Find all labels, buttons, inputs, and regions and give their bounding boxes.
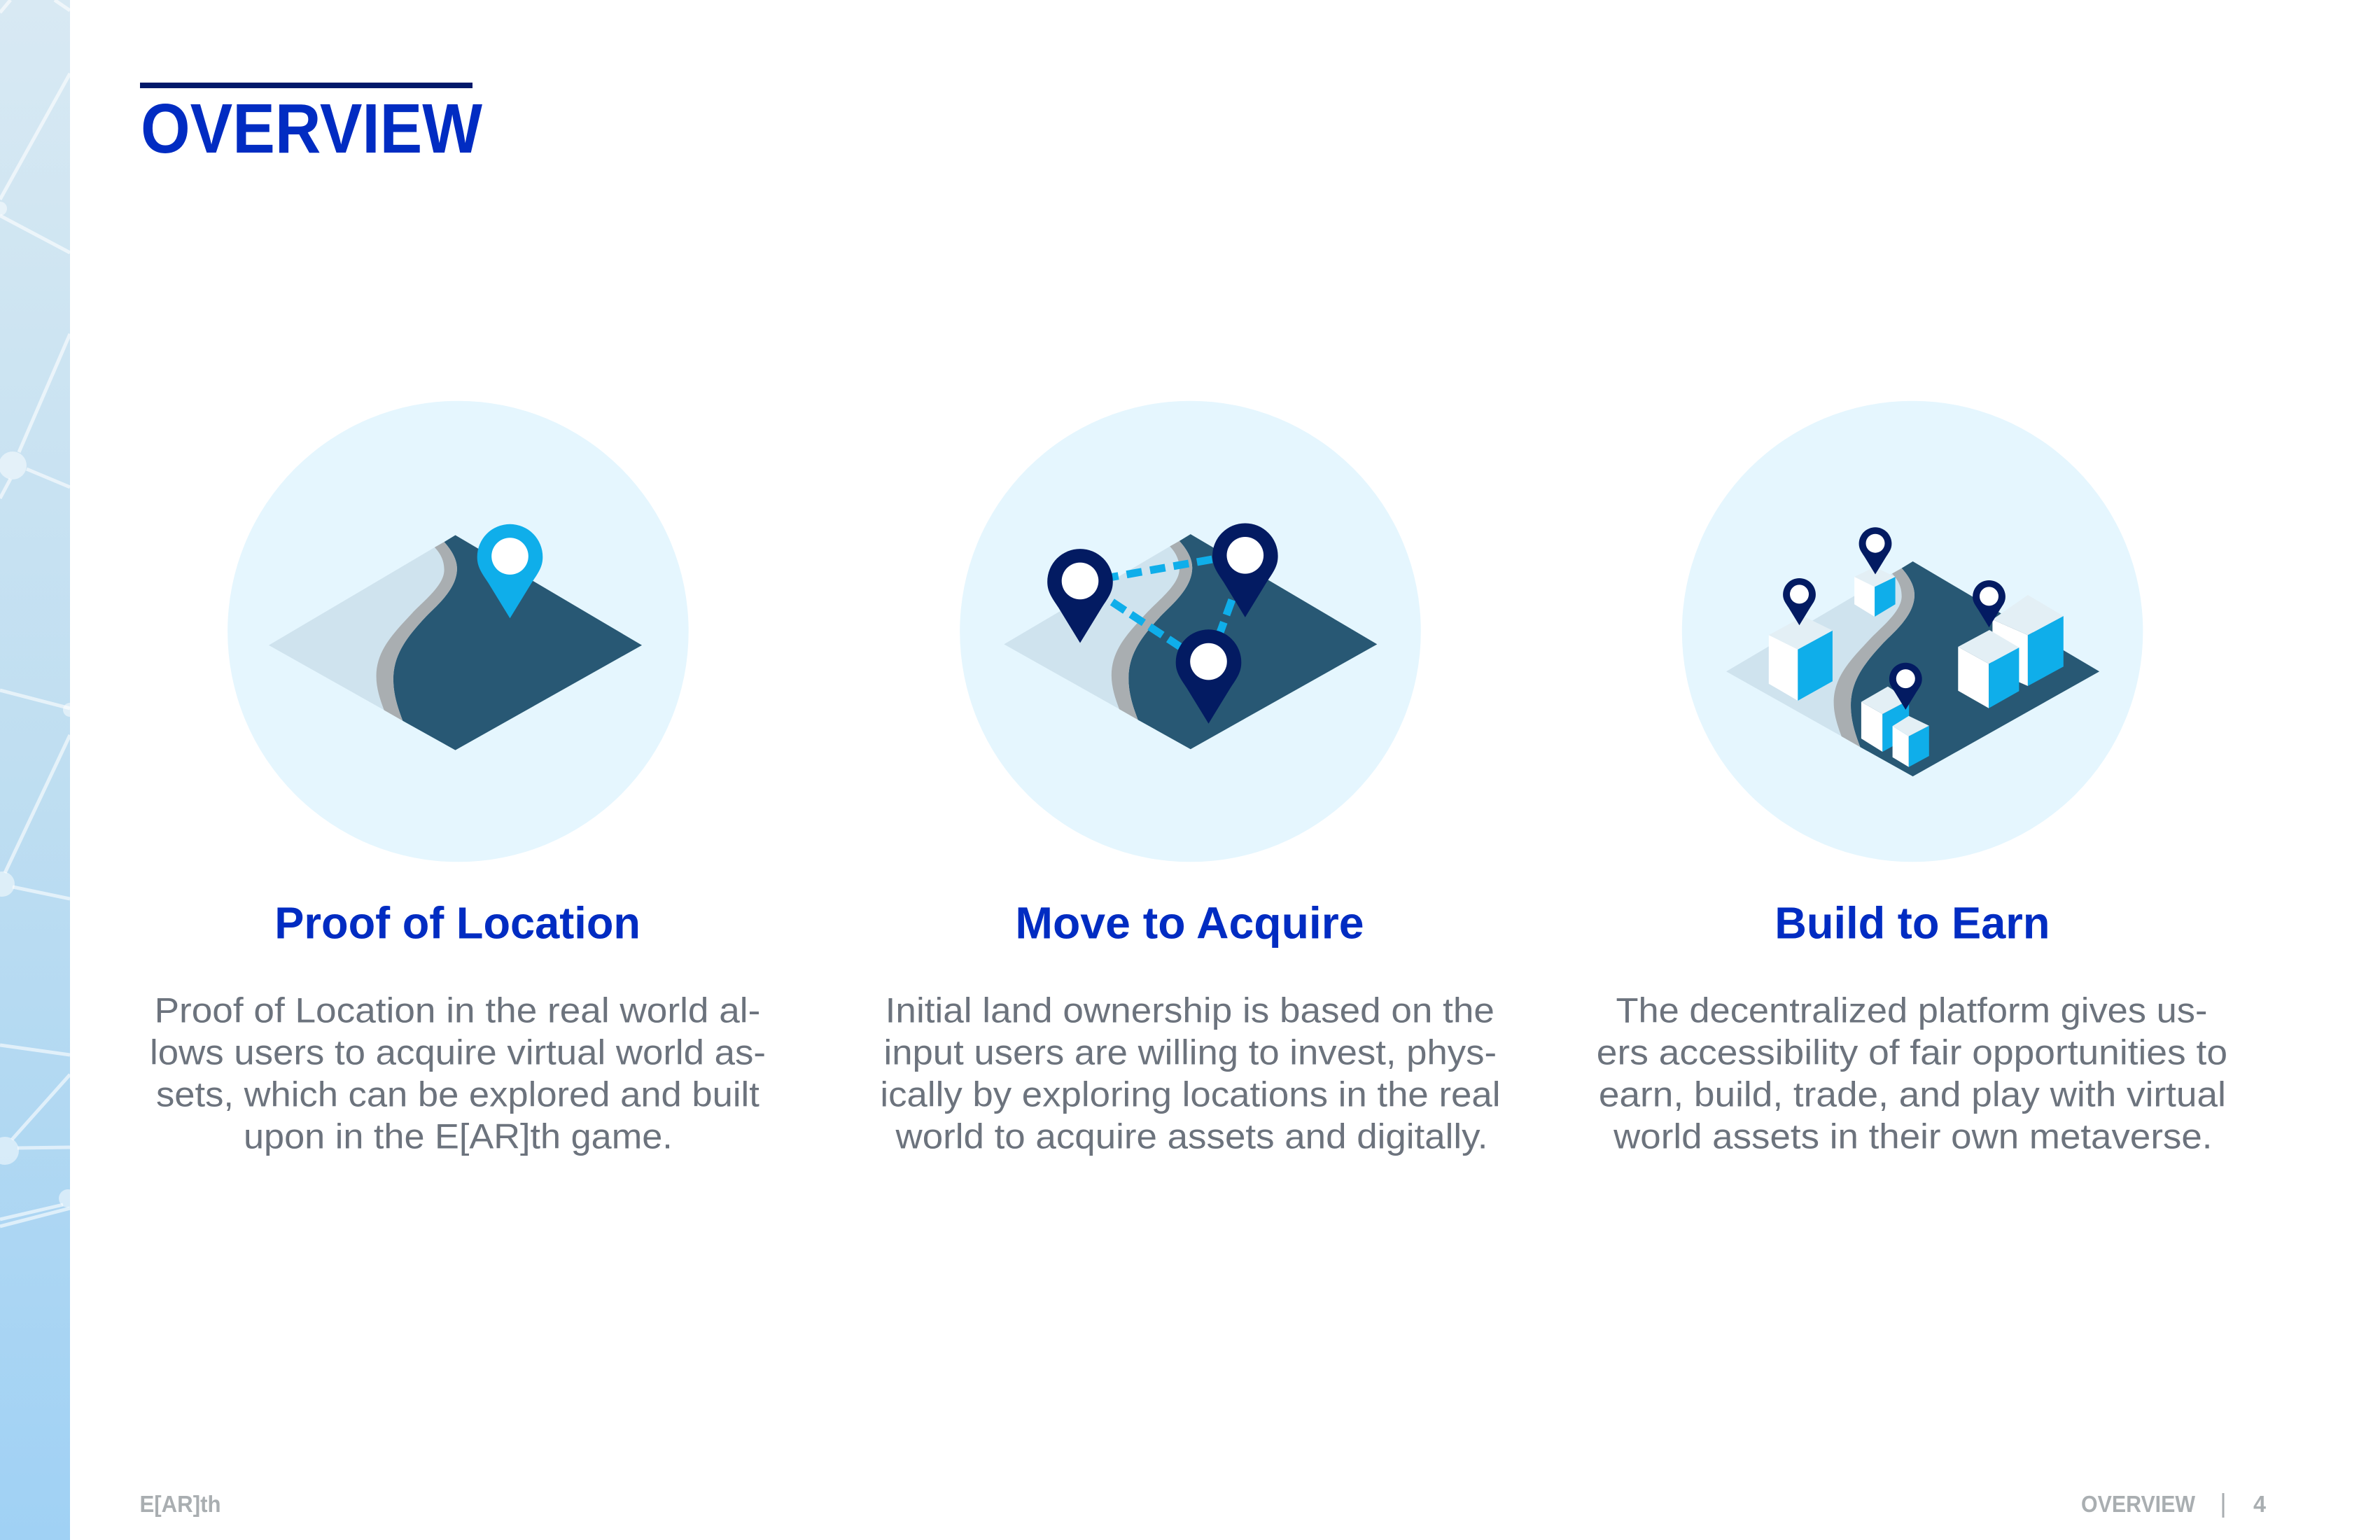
heading: Build to Earn (1774, 898, 2050, 948)
sidebar with network pattern (0, 0, 77, 1540)
heading: Proof of Location (274, 898, 640, 948)
icon: map with three connected pins (960, 401, 1421, 862)
footer section label and page number: OVERVIEW (2081, 1491, 2196, 1517)
body text: The decentralized platform gives us- (1616, 991, 2207, 1030)
body text: world to acquire assets and digitally. (895, 1117, 1488, 1156)
title rule (140, 83, 472, 88)
footer section label and page number: 4 (2253, 1491, 2267, 1517)
footer section label and page number (2081, 1491, 2267, 1518)
icon: map with buildings and pins (1682, 401, 2143, 862)
body text: upon in the E[AR]th game. (244, 1117, 673, 1156)
body text (880, 991, 1501, 1156)
footer brand: E[AR]th (140, 1491, 221, 1517)
panel: Build to Earn (1597, 401, 2227, 1156)
title: OVERVIEW (141, 90, 483, 168)
body text: Initial land ownership is based on the (886, 991, 1494, 1030)
panel: Move to Acquire (880, 401, 1501, 1156)
panel: Proof of Location (150, 401, 766, 1156)
heading: Move to Acquire (1015, 898, 1364, 948)
body text: ically by exploring locations in the real (880, 1075, 1501, 1114)
body text: sets, which can be explored and built (156, 1075, 760, 1114)
body text (1597, 991, 2227, 1156)
body text: world assets in their own metaverse. (1613, 1117, 2212, 1156)
body text: lows users to acquire virtual world as- (150, 1033, 766, 1072)
body text: earn, build, trade, and play with virtual (1599, 1075, 2226, 1114)
body text: input users are willing to invest, phys- (883, 1033, 1497, 1072)
body text: Proof of Location in the real world al- (155, 991, 760, 1030)
icon: map with single location pin (227, 401, 689, 862)
body text: ers accessibility of fair opportunities to (1597, 1033, 2227, 1072)
body text (150, 991, 766, 1156)
